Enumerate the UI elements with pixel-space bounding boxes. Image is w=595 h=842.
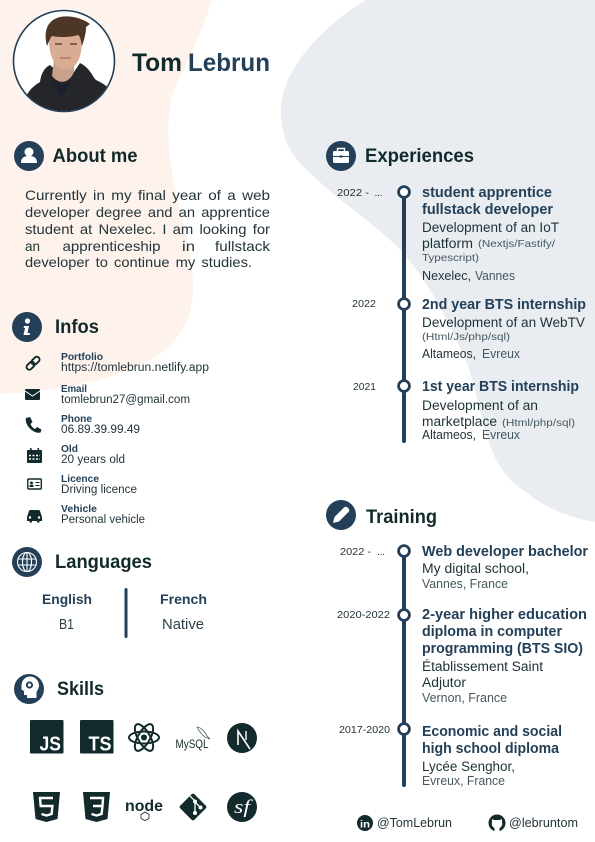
entry: 2nd year internship: 2022 bbox=[352, 298, 376, 310]
icon: javascript bbox=[30, 720, 64, 756]
entry: BTS SIO: programming (BTS SIO) bbox=[422, 640, 583, 657]
info row: phone: 06.89.39.99.49 bbox=[61, 424, 140, 436]
entry: BTS SIO: diploma in computer bbox=[422, 623, 562, 640]
title: name: Tom bbox=[132, 49, 182, 77]
info row: email: Email bbox=[61, 383, 87, 395]
profile photo bbox=[14, 10, 114, 114]
entry: BTS SIO: Adjutor bbox=[422, 675, 467, 690]
text block: about me paragraph: fullstack bbox=[215, 238, 271, 254]
text block: about me paragraph: developer degree and an apprentice bbox=[25, 204, 270, 220]
entry: high school: 2017-2020 bbox=[339, 724, 390, 736]
heading: infos: Infos bbox=[55, 317, 99, 338]
info row: age: Old bbox=[61, 443, 78, 455]
info row: licence: Driving licence bbox=[61, 484, 137, 496]
timeline: training bbox=[399, 546, 409, 787]
entry: BTS SIO: Vernon, France bbox=[422, 691, 507, 705]
entry: bachelor bbox=[340, 543, 588, 591]
icon: typescript bbox=[80, 720, 114, 756]
entry: student apprentice: fullstack developer bbox=[422, 201, 553, 218]
icon: html5 bbox=[33, 792, 60, 822]
entry: student apprentice: Nexelec, bbox=[422, 269, 471, 283]
icon: mysql: MySQL bbox=[176, 739, 209, 751]
info row: vehicle bbox=[27, 503, 145, 526]
icon: info bbox=[12, 312, 42, 342]
entry: 2nd year internship: (Html/Js/php/sql) bbox=[422, 331, 510, 343]
icon: head with gear bbox=[14, 674, 44, 704]
info row: vehicle: Personal vehicle bbox=[61, 514, 145, 526]
info row: licence bbox=[28, 473, 137, 496]
footer: linkedin bbox=[357, 815, 452, 831]
entry: student apprentice: Typescript) bbox=[422, 252, 479, 264]
footer: github: @lebruntom bbox=[509, 816, 578, 830]
icon: briefcase bbox=[326, 141, 356, 171]
info row: phone bbox=[26, 413, 140, 436]
text block: about me paragraph: in bbox=[182, 238, 195, 254]
entry: student apprentice: 2022 - bbox=[337, 187, 370, 199]
entry: bachelor: My digital school, bbox=[422, 561, 529, 576]
icon: css3 bbox=[83, 792, 110, 822]
entry: student apprentice bbox=[337, 184, 559, 283]
entry: bachelor: Vannes, France bbox=[422, 577, 508, 591]
footer: linkedin: @TomLebrun bbox=[377, 816, 452, 830]
entry: 2nd year internship: 2nd year BTS internship bbox=[422, 296, 586, 313]
language: french: Native bbox=[162, 617, 204, 633]
text block: about me paragraph: student at Nexelec. I am looking for bbox=[25, 221, 270, 237]
language: english bbox=[42, 591, 92, 633]
text block: about me paragraph: Currently in my final year of a web bbox=[25, 187, 270, 203]
panel: training bbox=[326, 500, 588, 788]
entry: 2nd year internship: Development of an WebTV bbox=[422, 315, 585, 330]
footer: github bbox=[488, 814, 578, 832]
entry: 1st year internship: 2021 bbox=[353, 381, 376, 393]
language: french: French bbox=[160, 591, 207, 607]
entry: student apprentice: student apprentice bbox=[422, 184, 552, 201]
icon: nodejs: node bbox=[125, 798, 163, 815]
title: name: Lebrun bbox=[188, 49, 270, 77]
heading: about me bbox=[14, 141, 138, 171]
icon: pencil bbox=[326, 500, 356, 530]
text block: about me paragraph: apprenticeship bbox=[62, 238, 161, 254]
icon: javascript: JS bbox=[40, 734, 61, 756]
info row: phone: Phone bbox=[61, 413, 92, 425]
heading: skills: Skills bbox=[57, 679, 104, 700]
entry: bachelor: 2022 - bbox=[340, 546, 372, 558]
background shape: grey blob bbox=[281, 0, 595, 522]
entry: student apprentice: Vannes bbox=[475, 269, 515, 283]
language: french bbox=[160, 591, 207, 633]
entry: student apprentice: (Nextjs/Fastify/ bbox=[478, 238, 555, 250]
panel: languages bbox=[12, 547, 207, 638]
title: name bbox=[132, 49, 270, 77]
entry: 1st year internship bbox=[353, 378, 579, 442]
entry: student apprentice: Development of an IoT bbox=[422, 220, 559, 235]
info row: age bbox=[27, 443, 125, 466]
icon: react bbox=[129, 722, 159, 753]
entry: 1st year internship: 1st year BTS internship bbox=[422, 378, 579, 395]
entry: high school: Economic and social bbox=[422, 723, 562, 740]
info row: email bbox=[25, 383, 190, 406]
timeline: experiences bbox=[399, 187, 409, 443]
info row: portfolio: https://tomlebrun.netlify.app bbox=[61, 362, 209, 374]
entry: BTS SIO: 2-year higher education bbox=[422, 606, 587, 623]
entry: student apprentice: ... bbox=[374, 187, 382, 199]
icon: git bbox=[179, 793, 207, 821]
entry: 2nd year internship: Evreux bbox=[482, 347, 521, 361]
text block: about me paragraph: developer to continue my studies. bbox=[25, 254, 252, 270]
icon: typescript: TS bbox=[88, 734, 112, 756]
entry: bachelor: ... bbox=[377, 546, 385, 558]
entry: 2nd year internship: Altameos, bbox=[422, 347, 476, 361]
info row: email: tomlebrun27@gmail.com bbox=[61, 394, 190, 406]
entry: BTS SIO bbox=[337, 606, 587, 705]
icon: person bbox=[14, 141, 44, 171]
entry: 1st year internship: Development of an bbox=[422, 398, 538, 413]
entry: high school: Evreux, France bbox=[422, 774, 505, 788]
entry: high school: high school diploma bbox=[422, 740, 560, 757]
language: english: English bbox=[42, 591, 92, 607]
entry: 2nd year internship bbox=[352, 296, 586, 361]
panel: infos bbox=[12, 312, 209, 526]
icon: symfony bbox=[227, 792, 257, 822]
panel: experiences bbox=[326, 141, 586, 443]
heading: languages: Languages bbox=[55, 552, 152, 573]
icon: globe bbox=[12, 547, 42, 577]
heading: about me: About me bbox=[52, 146, 138, 167]
entry: 1st year internship: (Html/php/sql) bbox=[502, 417, 575, 429]
entry: bachelor: Web developer bachelor bbox=[422, 543, 588, 560]
entry: BTS SIO: Établissement Saint bbox=[422, 659, 543, 674]
heading: experiences: Experiences bbox=[365, 146, 474, 167]
info row: vehicle: Vehicle bbox=[61, 503, 97, 515]
info row: licence: Licence bbox=[61, 473, 99, 485]
entry: high school: Lycée Senghor, bbox=[422, 759, 515, 774]
entry: student apprentice: platform bbox=[422, 236, 473, 251]
entry: high school bbox=[339, 723, 562, 788]
info row: age: 20 years old bbox=[61, 454, 125, 466]
text block: about me paragraph: an bbox=[25, 238, 40, 254]
entry: 1st year internship: Altameos, bbox=[422, 428, 476, 442]
panel: skills bbox=[14, 674, 257, 822]
info row: portfolio bbox=[25, 351, 209, 374]
icon: nextjs bbox=[227, 723, 257, 753]
info row: portfolio: Portfolio bbox=[61, 351, 103, 363]
footer: linkedin: in bbox=[360, 820, 370, 830]
background shape: peach blob bbox=[0, 0, 212, 394]
language: english: B1 bbox=[59, 617, 74, 633]
icon: symfony: sf bbox=[234, 797, 253, 818]
icon: mysql bbox=[176, 727, 210, 751]
entry: 1st year internship: Evreux bbox=[482, 428, 521, 442]
entry: BTS SIO: 2020-2022 bbox=[337, 609, 390, 621]
entry: 1st year internship: marketplace bbox=[422, 414, 497, 429]
text block: about me paragraph bbox=[25, 187, 271, 270]
heading: training: Training bbox=[366, 507, 437, 528]
